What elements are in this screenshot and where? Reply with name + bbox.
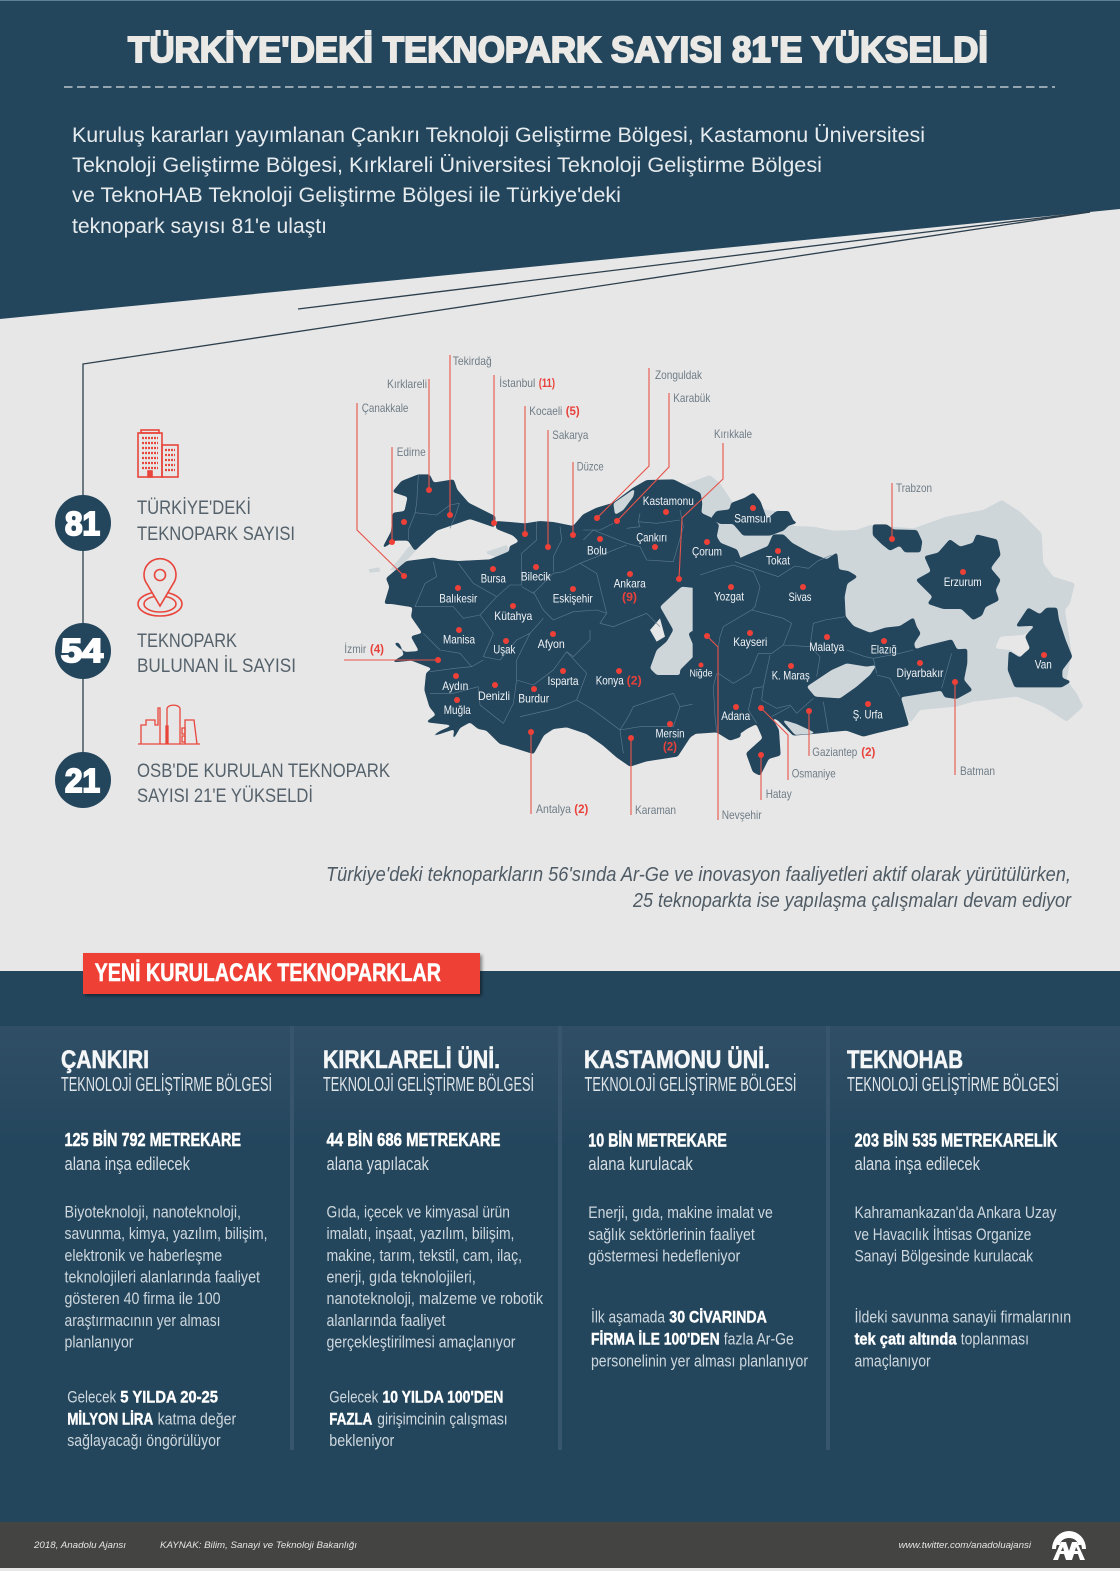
map province labels inside: Eskişehir bbox=[553, 592, 593, 606]
map province labels outside: Nevşehir bbox=[722, 808, 762, 822]
stat: 81 teknopark: TEKNOPARK SAYISI bbox=[137, 524, 295, 545]
panel: Kırklareli Üni.: TEKNOLOJİ GELİŞTİRME BÖLGESİ bbox=[323, 1073, 534, 1096]
italic note: Türkiye'deki teknoparkların 56'sında Ar-Ge ve inovasyon faaliyetleri aktif olarak yürütülürken, bbox=[326, 864, 1071, 886]
map province labels outside: Kırıkkale bbox=[714, 427, 752, 441]
intro text: ve TeknoHAB Teknoloji Geliştirme Bölgesi ile Türkiye'deki bbox=[72, 184, 621, 207]
map province labels inside: Samsun bbox=[734, 511, 771, 525]
map province labels inside: Tokat bbox=[766, 553, 791, 567]
map province labels outside: Gaziantep bbox=[812, 745, 858, 759]
panel: Kastamonu Üni.: FİRMA İLE 100'DEN bbox=[591, 1329, 720, 1348]
stat: 81 teknopark: TÜRKİYE'DEKİ bbox=[137, 498, 251, 519]
panel: TeknoHAB: tek çatı altında bbox=[854, 1329, 957, 1348]
panel: TeknoHAB: ve Havacılık İhtisas Organize bbox=[854, 1225, 1031, 1244]
panel: Kastamonu Üni.: sağlık sektörlerinin faaliyet bbox=[588, 1225, 755, 1244]
panel: Çankırı: teknolojileri alanlarında faaliyet bbox=[64, 1268, 260, 1287]
footer bar: KAYNAK: Bilim, Sanayi ve Teknoloji Bakanlığı bbox=[160, 1540, 357, 1551]
map province labels outside: Kocaeli bbox=[529, 404, 562, 418]
icon: map pin bbox=[138, 559, 182, 616]
panel: Çankırı: ÇANKIRI bbox=[61, 1046, 149, 1074]
map province labels inside: Isparta bbox=[548, 674, 579, 688]
map province labels inside: Mersin bbox=[656, 726, 684, 740]
map province labels inside: Kayseri bbox=[733, 635, 767, 649]
map province labels inside: Malatya bbox=[809, 640, 844, 654]
map province labels outside: Düzce bbox=[577, 460, 604, 474]
map province labels inside: Yozgat bbox=[714, 590, 745, 604]
panel: Çankırı bbox=[61, 1046, 272, 1450]
panel: Çankırı: sağlayacağı öngörülüyor bbox=[67, 1431, 221, 1450]
map province labels outside: (4) bbox=[370, 642, 384, 656]
icon: buildings bbox=[138, 430, 178, 477]
lower panel background bbox=[0, 971, 1120, 1522]
panel: Kırklareli Üni.: 44 BİN 686 METREKARE bbox=[326, 1130, 500, 1150]
panel: TeknoHAB: Kahramankazan'da Ankara Uzay bbox=[854, 1203, 1057, 1222]
footer bar bbox=[0, 1522, 1120, 1568]
panel: Çankırı: araştırmacının yer alması bbox=[64, 1311, 220, 1330]
map province labels outside: Trabzon bbox=[896, 481, 932, 495]
panel: Kastamonu Üni.: TEKNOLOJİ GELİŞTİRME BÖLGESİ bbox=[584, 1073, 796, 1096]
panel: Kırklareli Üni.: girişimcinin çalışması bbox=[377, 1409, 508, 1428]
panel: Kastamonu Üni.: göstermesi hedefleniyor bbox=[588, 1247, 741, 1266]
panel: Kırklareli Üni.: KIRKLARELİ ÜNİ. bbox=[323, 1045, 500, 1074]
panel: TeknoHAB: TEKNOHAB bbox=[847, 1046, 963, 1074]
panel: Kastamonu Üni.: fazla Ar-Ge bbox=[724, 1329, 794, 1348]
stat: 54 il bbox=[55, 559, 296, 679]
map of Turkey bbox=[344, 354, 1083, 822]
map province labels inside: Elazığ bbox=[871, 642, 897, 656]
map province labels outside: Çanakkale bbox=[362, 401, 409, 415]
panel: Çankırı: TEKNOLOJİ GELİŞTİRME BÖLGESİ bbox=[61, 1073, 272, 1096]
intro text: Teknoloji Geliştirme Bölgesi, Kırklareli Üniversitesi Teknoloji Geliştirme Bölgesi bbox=[72, 154, 822, 177]
panel: Çankırı: alana inşa edilecek bbox=[64, 1154, 191, 1174]
stat: 81 teknopark bbox=[55, 430, 295, 551]
italic note: 25 teknoparkta ise yapılaşma çalışmaları devam ediyor bbox=[632, 890, 1072, 912]
panel: Kastamonu Üni.: personelinin yer alması planlanıyor bbox=[591, 1352, 808, 1371]
stat: 54 il: 54 bbox=[61, 632, 104, 669]
map province labels outside: Hatay bbox=[766, 787, 792, 801]
map province labels inside: Bursa bbox=[481, 572, 506, 586]
panel: Kırklareli Üni.: Gelecek bbox=[329, 1388, 379, 1407]
map province labels outside: Edirne bbox=[397, 445, 426, 459]
panel: Kastamonu Üni.: İlk aşamada bbox=[591, 1308, 665, 1327]
panel: Kırklareli Üni.: FAZLA bbox=[329, 1409, 372, 1428]
map province labels inside: Uşak bbox=[493, 643, 516, 657]
map province labels outside: Osmaniye bbox=[792, 767, 836, 781]
panel: Kırklareli Üni.: alana yapılacak bbox=[326, 1154, 430, 1174]
map province labels outside: Zonguldak bbox=[655, 368, 703, 382]
stat: 21 OSB: 21 bbox=[65, 762, 100, 799]
map province labels inside: Adana bbox=[721, 709, 750, 723]
panel: TeknoHAB: 203 BİN 535 METREKARELİK bbox=[854, 1131, 1058, 1151]
panel: TeknoHAB bbox=[847, 1046, 1071, 1371]
map province labels inside: Ş. Urfa bbox=[853, 708, 883, 722]
map province labels outside bbox=[344, 354, 995, 822]
map province labels inside: K. Maraş bbox=[772, 668, 810, 682]
map province labels inside: Aydın bbox=[442, 679, 468, 693]
stat: 54 il: TEKNOPARK bbox=[137, 631, 237, 652]
map province labels inside: Afyon bbox=[538, 637, 565, 651]
panel: Kastamonu Üni.: Enerji, gıda, makine imalat ve bbox=[588, 1203, 773, 1222]
panel: Kastamonu Üni.: alana kurulacak bbox=[588, 1154, 694, 1174]
map province labels outside: (5) bbox=[566, 404, 580, 418]
panel: Kastamonu Üni.: 30 CİVARINDA bbox=[669, 1308, 767, 1327]
map province labels outside: (2) bbox=[861, 745, 875, 759]
intro text bbox=[72, 124, 925, 238]
icon: AA logo bbox=[1052, 1531, 1086, 1560]
map province labels inside: Balıkesir bbox=[439, 592, 477, 606]
red section banner bbox=[83, 953, 480, 994]
map province labels inside bbox=[439, 494, 1052, 754]
map province labels inside: (2) bbox=[627, 674, 642, 688]
map province labels inside: Erzurum bbox=[944, 575, 982, 589]
map province labels outside: (11) bbox=[539, 376, 555, 390]
panel: TeknoHAB: amaçlanıyor bbox=[854, 1352, 931, 1371]
intro text: teknopark sayısı 81'e ulaştı bbox=[72, 215, 327, 238]
map: western provinces with teknopark bbox=[368, 475, 740, 766]
map province labels outside: İzmir bbox=[344, 642, 366, 656]
panel: Çankırı: planlanıyor bbox=[64, 1333, 134, 1352]
footer bar: 2018, Anadolu Ajansı bbox=[33, 1540, 126, 1551]
map province labels outside: Batman bbox=[960, 764, 995, 778]
map province labels inside: Diyarbakır bbox=[896, 666, 944, 680]
title: TÜRKİYE'DEKİ TEKNOPARK SAYISI 81'E YÜKSELDİ bbox=[128, 29, 988, 70]
panel: TeknoHAB: Sanayi Bölgesinde kurulacak bbox=[854, 1247, 1034, 1266]
panel: TeknoHAB: İldeki savunma sanayii firmalarının bbox=[854, 1308, 1071, 1327]
map: eastern dark provinces bbox=[693, 493, 1072, 775]
stat: 81 teknopark: 81 bbox=[65, 505, 100, 542]
map province labels outside: Antalya bbox=[536, 802, 571, 816]
map province labels outside: Karabük bbox=[673, 391, 711, 405]
map province labels inside: Kütahya bbox=[494, 609, 533, 623]
italic note bbox=[326, 864, 1072, 912]
panel: Çankırı: elektronik ve haberleşme bbox=[64, 1246, 222, 1265]
panel: Kırklareli Üni.: alanlarında faaliyet bbox=[326, 1311, 446, 1330]
stat: 21 OSB: SAYISI 21'E YÜKSELDİ bbox=[137, 786, 313, 807]
map province labels inside: Çankırı bbox=[636, 531, 667, 545]
panel: Çankırı: 125 BİN 792 METREKARE bbox=[64, 1130, 241, 1150]
footer bar: www.twitter.com/anadoluajansi bbox=[899, 1540, 1032, 1551]
panel: Kırklareli Üni.: imalatı, inşaat, yazılım, bilişim, bbox=[326, 1224, 514, 1243]
map province labels inside: Ankara bbox=[614, 577, 646, 591]
panel: Kırklareli Üni.: makine, tarım, tekstil, cam, ilaç, bbox=[326, 1246, 522, 1265]
map province labels inside: Niğde bbox=[690, 669, 713, 680]
panel: Kastamonu Üni.: KASTAMONU ÜNİ. bbox=[584, 1045, 770, 1074]
stat: 21 OSB: OSB'DE KURULAN TEKNOPARK bbox=[137, 761, 390, 782]
panel: Çankırı: Biyoteknoloji, nanoteknoloji, bbox=[64, 1202, 241, 1221]
map province labels inside: Bolu bbox=[587, 543, 607, 557]
panel: Kastamonu Üni. bbox=[584, 1045, 808, 1371]
map province labels outside: (2) bbox=[574, 802, 588, 816]
map province labels inside: Van bbox=[1035, 657, 1052, 671]
panel: Çankırı: katma değer bbox=[158, 1409, 236, 1428]
red section banner: YENİ KURULACAK TEKNOPARKLAR bbox=[95, 959, 441, 987]
map province labels inside: (9) bbox=[622, 590, 637, 604]
panel: Çankırı: 5 YILDA 20-25 bbox=[120, 1388, 218, 1407]
header panel bbox=[0, 0, 1120, 319]
map leader lines bbox=[344, 355, 955, 820]
map province labels inside: Bilecik bbox=[521, 570, 552, 584]
panel: Çankırı: Gelecek bbox=[67, 1388, 117, 1407]
map province labels outside: İstanbul bbox=[499, 376, 535, 390]
panel: TeknoHAB: alana inşa edilecek bbox=[854, 1154, 981, 1174]
panel: TeknoHAB: toplanması bbox=[961, 1329, 1029, 1348]
intro text: Kuruluş kararları yayımlanan Çankırı Teknoloji Geliştirme Bölgesi, Kastamonu Üniversitesi bbox=[72, 124, 925, 147]
map province labels inside: Denizli bbox=[478, 689, 510, 703]
panel: Kırklareli Üni.: nanoteknoloji, malzeme ve robotik bbox=[326, 1289, 544, 1308]
panel: Çankırı: savunma, kimya, yazılım, bilişim, bbox=[64, 1224, 268, 1243]
panel: Kırklareli Üni.: gerçekleştirilmesi amaçlanıyor bbox=[326, 1333, 516, 1352]
panel: Kırklareli Üni.: Gıda, içecek ve kimyasal ürün bbox=[326, 1202, 510, 1221]
panel: Çankırı: gösteren 40 firma ile 100 bbox=[64, 1289, 220, 1308]
map province labels inside: Muğla bbox=[444, 703, 471, 717]
map dots bbox=[389, 487, 1047, 758]
map province labels outside: Sakarya bbox=[552, 428, 589, 442]
map province labels outside: Tekirdağ bbox=[453, 354, 492, 368]
stat: 54 il: BULUNAN İL SAYISI bbox=[137, 656, 296, 677]
map province labels outside: Kırklareli bbox=[387, 377, 427, 391]
panel: Çankırı: MİLYON LİRA bbox=[67, 1409, 153, 1428]
stat: 21 OSB bbox=[55, 705, 390, 808]
map province labels inside: Konya bbox=[596, 674, 624, 688]
panel: Kırklareli Üni.: 10 YILDA 100'DEN bbox=[382, 1388, 503, 1407]
map province labels inside: Kastamonu bbox=[643, 494, 694, 508]
panel: Kırklareli Üni.: bekleniyor bbox=[329, 1431, 395, 1450]
map: eastern provinces without teknopark bbox=[683, 475, 1083, 723]
map province labels inside: Manisa bbox=[443, 633, 475, 647]
icon: factory bbox=[138, 705, 200, 744]
map province labels inside: (2) bbox=[663, 740, 677, 754]
panel: Kastamonu Üni.: 10 BİN METREKARE bbox=[588, 1131, 727, 1151]
map province labels inside: Çorum bbox=[692, 545, 722, 559]
map province labels inside: Sivas bbox=[788, 590, 812, 604]
decorative converging lines bbox=[83, 212, 1090, 780]
panel: Kırklareli Üni.: enerji, gıda teknolojileri, bbox=[326, 1268, 476, 1287]
map province labels inside: Burdur bbox=[518, 692, 549, 706]
panel: Kırklareli Üni. bbox=[323, 1045, 544, 1450]
map province labels outside: Karaman bbox=[635, 803, 676, 817]
